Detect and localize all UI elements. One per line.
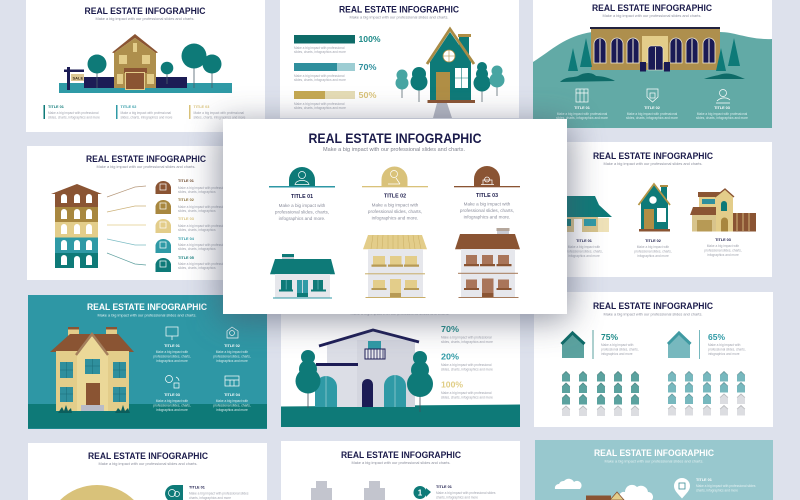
clouds	[555, 479, 653, 500]
text block: title 01: TITLE 01	[164, 344, 180, 348]
text block: title 02: Make a big impact with	[372, 202, 419, 208]
illustration: teal house with trees	[396, 29, 504, 118]
text block: title 03: Make a big impact with	[464, 202, 511, 206]
text block: title 03: infographics and more	[707, 253, 739, 257]
icon: house coin	[227, 327, 238, 338]
text block: title 01: Make a big impact with professional slides	[436, 491, 496, 495]
connector lines	[107, 186, 146, 265]
icon: plan	[576, 89, 588, 102]
text block: title 01: TITLE 01	[696, 478, 712, 482]
title: REAL ESTATE INFOGRAPHIC	[593, 151, 713, 162]
stat: 70%: slides, charts, infographics and more	[441, 340, 493, 344]
stat: 100%: 100%	[441, 380, 463, 390]
text block: title 01	[565, 239, 603, 258]
text block: title 01: slides, charts, infographics and more	[556, 116, 608, 120]
stat: 70%: Make a big impact with professional	[441, 336, 492, 340]
text block: title 02	[213, 344, 251, 363]
bar: 100%	[294, 34, 381, 54]
icon badge	[165, 485, 183, 500]
panel: light teal slide	[535, 440, 773, 500]
text block: title 02: Make a big impact with professional	[120, 111, 171, 115]
text block: title 03: TITLE 03	[715, 238, 731, 242]
title: REAL ESTATE INFOGRAPHIC	[87, 302, 207, 313]
text block: titles 01 to 05: slides, charts, infographics	[178, 266, 216, 270]
bar: 50%: Make a big impact with professional	[294, 102, 345, 106]
stat: 65%: professional slides, charts,	[708, 348, 746, 352]
title: REAL ESTATE INFOGRAPHIC	[339, 4, 459, 16]
bar: 50%	[294, 90, 377, 110]
bar: 100%: Make a big impact with professional	[294, 46, 345, 50]
stat: 70%	[441, 324, 493, 344]
text block: title 02: professional slides, charts,	[213, 354, 251, 358]
illustration: long building	[560, 27, 745, 82]
text block: title 01: charts, infographics and more	[189, 496, 231, 500]
text block: title 01	[275, 194, 329, 221]
text block: title 02	[634, 239, 672, 258]
panel: progress bars slide	[280, 0, 519, 118]
text block: title 03: slides, charts, infographics and more	[194, 116, 246, 120]
text block: title 03: Make a big impact with	[156, 399, 188, 403]
text block: title 02: TITLE 02	[644, 106, 660, 110]
text block: title 03: Make a big impact with professional	[194, 111, 244, 115]
stat: 100%: slides, charts, infographics and more	[441, 396, 493, 400]
panel: three houses slide	[540, 142, 772, 277]
pictogram: 75 percent houses	[562, 371, 639, 416]
text block: titles 01 to 05: TITLE 05	[178, 256, 194, 260]
text block: title 01	[696, 478, 756, 492]
illustration: tan house with fence	[690, 189, 756, 232]
text block: title 02: professional slides, charts,	[368, 209, 422, 214]
text block: title 01: Make a big impact with professional slides	[696, 484, 756, 488]
text block: titles 01 to 05: Make a big impact with professional	[178, 262, 229, 266]
title: REAL ESTATE INFOGRAPHIC	[84, 6, 206, 17]
illustration: one storey teal house	[270, 254, 335, 298]
stat: 20%: slides, charts, infographics and more	[441, 368, 493, 372]
text block: titles 01 to 05: TITLE 01	[178, 179, 194, 183]
title: REAL ESTATE INFOGRAPHIC	[593, 301, 713, 312]
text block: title 01: Make a big impact with	[156, 350, 188, 354]
text block: title 03	[704, 238, 742, 257]
text block: title 02: infographics and more.	[372, 216, 418, 220]
text block: title 02: TITLE 02	[120, 105, 136, 109]
text block: title 01	[189, 486, 249, 500]
text block: title 01: infographics and more	[568, 254, 600, 258]
stat: 100%	[441, 380, 493, 400]
subtitle: Make a big impact with our professional slides and charts.	[352, 461, 450, 465]
text block: title 03: infographics and more.	[464, 214, 510, 220]
gray building silhouettes	[311, 481, 385, 500]
subtitle: Make a big impact with our professional slides and charts.	[604, 460, 704, 464]
text block: titles 01 to 05: slides, charts, infographics	[178, 247, 216, 251]
text block: title 03: Make a big impact with	[707, 244, 739, 248]
text block: titles 01 to 05: Make a big impact with professional	[178, 243, 229, 247]
panel: white villa slide	[281, 305, 520, 427]
text block: title 01: Make a big impact with professional	[557, 112, 608, 116]
panel: gold circle slide	[28, 443, 267, 500]
text block: title 03: professional slides, charts,	[460, 208, 514, 213]
text block: title 03: TITLE 03	[164, 393, 180, 397]
title: REAL ESTATE INFOGRAPHIC	[594, 448, 714, 459]
text block: title 03: professional slides, charts,	[704, 248, 742, 252]
panel: sale house slide	[26, 0, 265, 132]
text block: title 02: infographics and more	[216, 359, 248, 363]
text block: title 02: TITLE 02	[384, 194, 406, 200]
stat: 65%	[668, 330, 746, 359]
text block: title 01: Make a big impact with	[568, 245, 600, 249]
text block: titles 01 to 05: TITLE 02	[178, 198, 194, 202]
text block: title 02: TITLE 02	[224, 344, 240, 348]
text block: title 01: professional slides, charts,	[565, 250, 603, 254]
illustration: house for sale	[59, 34, 232, 93]
bar: 100%: slides, charts, infographics and more	[294, 50, 346, 54]
panel: teal mansion slide	[28, 295, 267, 429]
subtitle: Make a big impact with our professional slides and charts.	[350, 16, 448, 20]
text block: title 03: infographics and more	[156, 408, 188, 412]
icon: hand with person	[716, 90, 730, 103]
bar: 70%: 70%	[358, 62, 377, 72]
subtitle: Make a big impact with our professional slides and charts.	[602, 14, 702, 18]
icon: sign	[166, 327, 178, 340]
illustration: wide teal house	[545, 196, 612, 232]
subtitle: Make a big impact with our professional slides and charts.	[323, 147, 465, 153]
stat: 65%: Make a big impact with	[708, 343, 741, 347]
text block: title 03: Make a big impact with professional	[697, 112, 748, 116]
text block: titles 01 to 05: Make a big impact with professional	[178, 186, 229, 190]
title: REAL ESTATE INFOGRAPHIC	[86, 154, 206, 165]
panel: building on hill slide	[533, 0, 772, 128]
text block: title 03: TITLE 03	[476, 193, 498, 199]
number marker 1: 1	[418, 488, 423, 498]
gold circle	[60, 485, 134, 500]
text block: title 03	[696, 106, 748, 120]
bar: 70%: Make a big impact with professional	[294, 74, 345, 78]
text block: title 01: TITLE 01	[574, 106, 590, 110]
text block: title 01	[436, 485, 496, 500]
text block: title 02: professional slides, charts,	[634, 250, 672, 254]
stat: 20%: 20%	[441, 352, 459, 362]
text block: title 01	[556, 106, 608, 120]
icon: shield house	[647, 89, 658, 102]
text block: title 01: charts, infographics and more	[696, 488, 738, 492]
text block: title 01	[153, 344, 191, 363]
stat: 70%: 70%	[441, 324, 459, 334]
text block: title 02: slides, charts, infographics and more	[120, 116, 173, 120]
text block: title 03: TITLE 03	[194, 105, 209, 109]
illustration: yellow mansion	[50, 327, 134, 413]
subtitle: Make a big impact with our professional slides and charts.	[96, 165, 196, 169]
icon: exchange	[166, 376, 179, 388]
text block: titles 01 to 05: slides, charts, infographics	[178, 209, 216, 213]
text block: title 01: infographics and more.	[279, 216, 325, 221]
text block: title 04: Make a big impact with	[216, 399, 248, 403]
text block: title 01: Make a big impact with professional	[48, 111, 99, 115]
illustration: tower	[51, 184, 102, 268]
text block: title 01: charts, infographics and more	[436, 496, 478, 500]
icon: gold dome	[362, 166, 428, 187]
pictogram: 65 percent houses	[668, 371, 745, 416]
subtitle: Make a big impact with our professional slides and charts.	[96, 17, 194, 21]
text block: title 01: infographics and more	[156, 359, 188, 363]
text block: title 01: professional slides, charts,	[153, 354, 191, 358]
stat: 20%: Make a big impact with professional	[441, 363, 492, 367]
stat: 100%: Make a big impact with professional	[441, 391, 492, 395]
text block: titles 01 to 05: Make a big impact with professional	[178, 205, 229, 209]
text block: title 03	[153, 393, 191, 412]
illustration: small teal house	[638, 184, 670, 232]
text block: title 01: TITLE 01	[576, 239, 592, 243]
center panel: three house types	[223, 119, 567, 314]
stat: 75%	[562, 330, 639, 359]
illustration: two storey gold house	[363, 235, 427, 298]
number marker 1	[414, 486, 431, 499]
icon badges	[156, 181, 171, 272]
text block: title 02	[626, 106, 678, 120]
panel: apartment tower slide	[27, 146, 237, 280]
text block: title 02	[368, 194, 422, 220]
stat: 75%: professional slides, charts,	[601, 348, 639, 352]
text block: title 01: TITLE 01	[436, 485, 452, 489]
text block: title 01: slides, charts, infographics and more	[48, 116, 100, 120]
icon: brown dome	[454, 166, 520, 187]
stat: 65%: 65%	[708, 332, 725, 342]
text block: title 01: TITLE 01	[189, 486, 205, 490]
text block: title 01: professional slides, charts,	[275, 210, 329, 214]
text block: title 03: slides, charts, infographics and more	[696, 116, 748, 120]
subtitle: Make a big impact with our professional slides and charts.	[604, 162, 702, 166]
stat: 75%: infographics and more	[601, 352, 633, 356]
text block: titles 01 to 05: TITLE 03	[178, 217, 194, 221]
text block: titles 01 to 05: Make a big impact with professional	[178, 224, 229, 228]
text block: titles 01 to 05: TITLE 04	[178, 237, 195, 241]
text block: titles 01 to 05	[178, 179, 229, 270]
title: REAL ESTATE INFOGRAPHIC	[592, 3, 712, 14]
subtitle: Make a big impact with our professional slides and charts.	[350, 312, 450, 316]
text block: title 02: infographics and more	[637, 254, 669, 258]
stat: 75%: Make a big impact with	[601, 343, 634, 347]
title: REAL ESTATE INFOGRAPHIC	[308, 130, 482, 146]
icon: storefront	[225, 376, 239, 386]
text block: title 04	[213, 393, 251, 412]
stat: 75%: 75%	[601, 332, 618, 342]
illustration: villa	[315, 330, 419, 407]
subtitle: Make a big impact with our professional slides and charts.	[604, 312, 702, 316]
icon: teal dome	[269, 167, 335, 188]
text block: title 02: Make a big impact with	[637, 245, 669, 249]
text block: title 03	[189, 105, 246, 120]
text block: title 01: TITLE 01	[291, 194, 313, 200]
text block: title 04: professional slides, charts,	[213, 404, 251, 408]
trees	[296, 350, 433, 412]
icon: map pin	[674, 478, 690, 498]
text block: title 03	[460, 193, 514, 220]
text block: title 04: TITLE 04	[224, 393, 241, 397]
text block: title 02: TITLE 02	[645, 239, 661, 243]
panel: house pictograms slide	[534, 292, 773, 427]
text block: titles 01 to 05: slides, charts, infographics	[178, 190, 216, 194]
teal hill	[533, 32, 772, 128]
bar: 50%: slides, charts, infographics and more	[294, 106, 346, 110]
text block: title 01: TITLE 01	[48, 105, 64, 109]
stat: 20%	[441, 352, 493, 372]
stat: 65%: infographics and more	[708, 352, 740, 356]
panel: numbered list slide	[281, 441, 520, 500]
text block: title 01	[44, 105, 100, 120]
house roof	[586, 492, 624, 500]
ground	[281, 404, 520, 427]
illustration: house for sale: SALE	[72, 76, 84, 80]
text block: title 04: infographics and more	[216, 408, 248, 412]
text block: title 02	[116, 105, 173, 120]
text block: title 02: Make a big impact with	[216, 350, 248, 354]
text block: title 02: slides, charts, infographics and more	[626, 116, 678, 120]
bar: 70%: slides, charts, infographics and more	[294, 78, 346, 82]
text block: title 01: Make a big impact with	[279, 203, 326, 208]
bar: 50%: 50%	[358, 90, 377, 100]
text block: title 03: TITLE 03	[714, 106, 730, 110]
subtitle: Make a big impact with our professional slides and charts.	[98, 314, 196, 318]
title: REAL ESTATE INFOGRAPHIC	[88, 451, 208, 462]
bar: 100%: 100%	[358, 34, 381, 44]
subtitle: Make a big impact with our professional slides and charts.	[98, 462, 198, 466]
center panel shadow	[220, 124, 570, 320]
title: REAL ESTATE INFOGRAPHIC	[341, 450, 461, 461]
text block: title 02: Make a big impact with professional	[627, 112, 678, 116]
text block: title 03: professional slides, charts,	[153, 404, 191, 408]
text block: title 01: Make a big impact with professional slides	[189, 492, 249, 496]
illustration: two storey brown house	[455, 228, 520, 298]
text block: titles 01 to 05: slides, charts, infographics	[178, 228, 216, 232]
bar: 70%	[294, 62, 377, 82]
